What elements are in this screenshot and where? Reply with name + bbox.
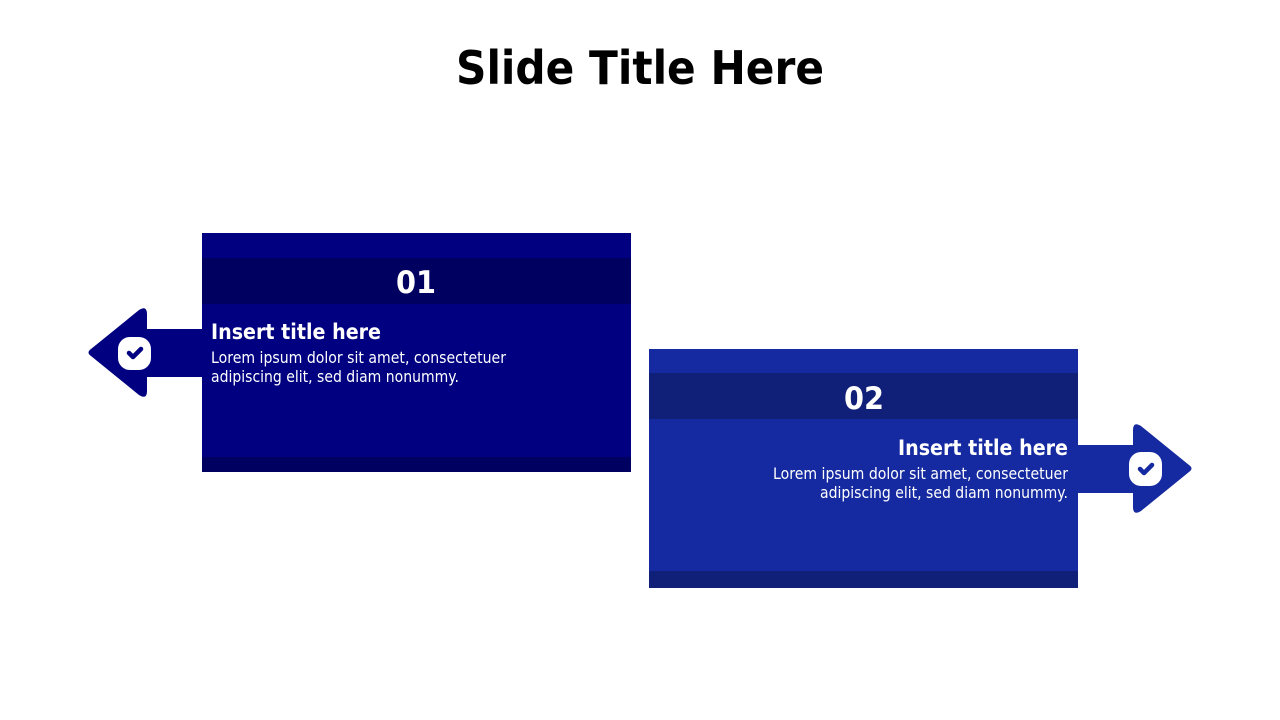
body text 01 bbox=[211, 348, 506, 386]
arrow: right bbox=[1078, 424, 1192, 513]
body text 02: Lorem ipsum dolor sit amet, consectetuer bbox=[773, 464, 1068, 483]
number band 02 bbox=[649, 373, 1078, 419]
title: Slide Title Here bbox=[456, 41, 824, 95]
body text 02: adipiscing elit, sed diam nonummy. bbox=[820, 483, 1068, 502]
heading 02: Insert title here bbox=[898, 436, 1068, 460]
number 01: 01 bbox=[396, 265, 436, 301]
body text 01: Lorem ipsum dolor sit amet, consectetuer bbox=[211, 348, 506, 367]
icon: check badge left bbox=[118, 337, 151, 370]
panel background 02 bbox=[649, 349, 1078, 588]
arrow shape right bbox=[1078, 424, 1192, 513]
arrow: left bbox=[88, 308, 202, 397]
panel background 01 bbox=[202, 233, 631, 472]
body text 02 bbox=[773, 464, 1068, 502]
number 02: 02 bbox=[844, 381, 884, 417]
body text 01: adipiscing elit, sed diam nonummy. bbox=[211, 367, 459, 386]
footer band 01 bbox=[202, 457, 631, 472]
footer band 02 bbox=[649, 571, 1078, 588]
panel: step 02 bbox=[649, 349, 1078, 588]
icon: check badge right bbox=[1129, 452, 1162, 486]
panel: step 01 bbox=[202, 233, 631, 472]
number band 01 bbox=[202, 258, 631, 304]
heading 01: Insert title here bbox=[211, 320, 381, 344]
arrow shape left bbox=[88, 308, 202, 397]
